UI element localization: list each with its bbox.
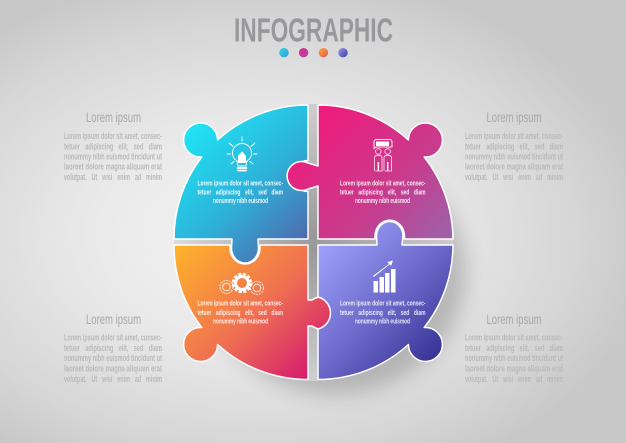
text block: top left: Lorem ipsum dolor sit amet, consec- bbox=[64, 131, 162, 142]
piece text bbox=[198, 299, 283, 326]
piece text: nonummy nibh euismod bbox=[355, 196, 410, 205]
text block: bottom left: laoreet dolore magna aliquam erat bbox=[64, 364, 163, 374]
text block: top left bbox=[64, 109, 163, 183]
piece text: Lorem ipsum dolor sit amet, consec- bbox=[340, 299, 426, 308]
panel: bottom right puzzle piece bbox=[318, 221, 453, 380]
text block: top right: tetuer adipiscing elit, sed diam bbox=[465, 142, 563, 152]
text block: top left: nonummy nibh euismod tincidunt ut bbox=[64, 152, 162, 162]
text block: bottom left bbox=[64, 311, 163, 385]
text block: top right: Lorem ipsum bbox=[486, 109, 542, 125]
text block: top right: laoreet dolore magna aliquam erat bbox=[465, 162, 564, 172]
piece text bbox=[340, 299, 426, 326]
panel: top right puzzle piece bbox=[287, 105, 453, 239]
title: INFOGRAPHIC bbox=[234, 12, 393, 48]
text block: bottom right: Lorem ipsum bbox=[486, 311, 542, 327]
piece text: tetuer adipiscing elit, sed diam bbox=[198, 308, 283, 317]
piece text: tetuer adipiscing elit, sed diam bbox=[340, 308, 426, 317]
text block: bottom left: volutpat. Ut wisi enim ad minim bbox=[64, 374, 162, 385]
text block: bottom left: Lorem ipsum dolor sit amet, consec- bbox=[64, 332, 162, 344]
text block: bottom right: laoreet dolore magna aliquam erat bbox=[465, 364, 564, 374]
text block: bottom left: Lorem ipsum bbox=[86, 311, 141, 327]
text block: top right: nonummy nibh euismod tincidunt ut bbox=[465, 152, 563, 162]
icon: gears bbox=[220, 274, 264, 294]
piece text bbox=[198, 178, 283, 205]
text block: bottom right bbox=[465, 311, 564, 385]
icon: bar chart with arrow bbox=[373, 260, 396, 292]
title colour dots bbox=[279, 48, 348, 57]
piece text: tetuer adipiscing elit, sed diam bbox=[340, 187, 426, 196]
gutter cross between pieces bbox=[174, 104, 453, 381]
text block: bottom right: tetuer adipiscing elit, sed diam bbox=[465, 343, 563, 354]
text block: bottom left: nonummy nibh euismod tincidunt ut bbox=[64, 353, 162, 364]
text block: bottom right: Lorem ipsum dolor sit amet, consec- bbox=[465, 332, 563, 344]
piece text: Lorem ipsum dolor sit amet, consec- bbox=[198, 178, 283, 187]
piece text: Lorem ipsum dolor sit amet, consec- bbox=[198, 299, 283, 308]
icon: light bulb bbox=[227, 137, 257, 170]
piece text: nonummy nibh euismod bbox=[213, 317, 268, 326]
text block: top left: Lorem ipsum bbox=[86, 109, 141, 125]
piece text: nonummy nibh euismod bbox=[213, 196, 268, 205]
circle drop shadow bbox=[205, 150, 465, 394]
piece text bbox=[340, 178, 426, 205]
panel: top left puzzle piece bbox=[174, 105, 308, 263]
text block: bottom left: tetuer adipiscing elit, sed diam bbox=[64, 343, 162, 354]
text block: top left: laoreet dolore magna aliquam erat bbox=[64, 162, 163, 172]
text block: bottom right: nonummy nibh euismod tincidunt ut bbox=[465, 353, 563, 364]
text block: top left: volutpat. Ut wisi enim ad minim bbox=[64, 172, 162, 183]
icon: two people with speech bubble bbox=[374, 140, 392, 171]
text block: top right bbox=[465, 109, 564, 183]
piece text: Lorem ipsum dolor sit amet, consec- bbox=[340, 178, 426, 187]
text block: top right: Lorem ipsum dolor sit amet, consec- bbox=[465, 131, 563, 142]
piece text: nonummy nibh euismod bbox=[355, 317, 410, 326]
panel: bottom left puzzle piece bbox=[174, 245, 337, 380]
text block: top left: tetuer adipiscing elit, sed diam bbox=[64, 142, 162, 152]
piece text: tetuer adipiscing elit, sed diam bbox=[198, 187, 283, 196]
